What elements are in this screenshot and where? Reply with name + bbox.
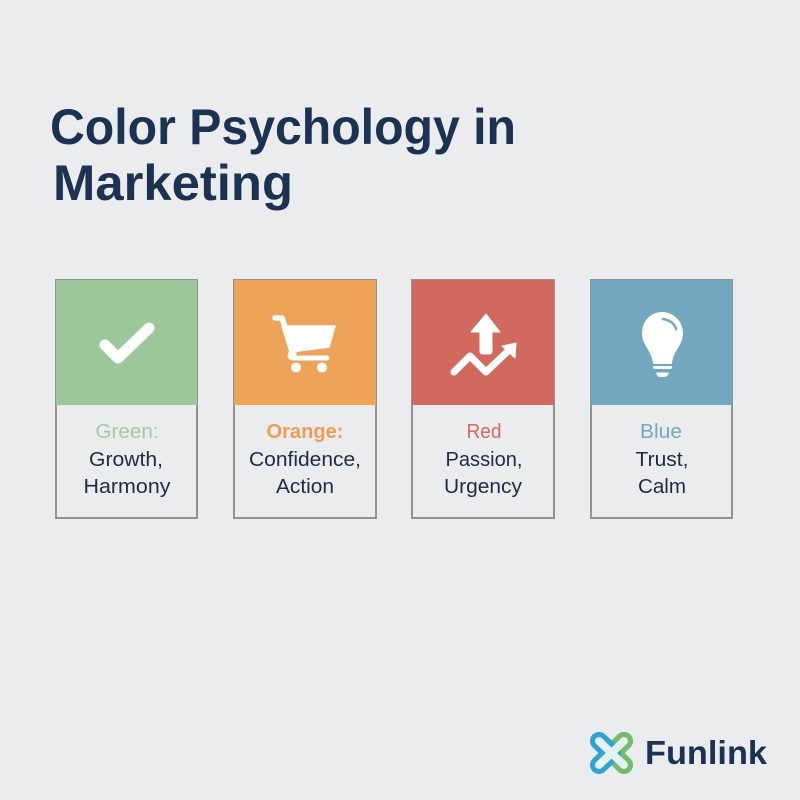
title: Marketing [53, 155, 293, 211]
logo: Funlink [599, 734, 768, 771]
icon: growth arrows [454, 314, 516, 372]
text: confidence action: Action [276, 475, 334, 498]
icon: logo cross [599, 741, 624, 765]
text: trust calm: Calm [638, 475, 686, 498]
label: red: Red [466, 420, 502, 443]
text: confidence action: Confidence, [249, 448, 361, 471]
label: blue: Blue [640, 420, 682, 443]
text: passion urgency [444, 448, 523, 498]
text: passion urgency: Passion, [446, 448, 522, 471]
icon: check mark [105, 328, 149, 358]
title: Color Psychology in [50, 99, 516, 155]
text: passion urgency: Urgency [444, 475, 523, 498]
wordmark: Funlink [645, 734, 768, 771]
text: growth harmony: Growth, [89, 448, 163, 471]
panel: green card [56, 280, 197, 518]
text: growth harmony: Harmony [84, 475, 171, 498]
panel: blue card [591, 280, 732, 518]
icon: shopping cart [275, 318, 335, 372]
icon: light bulb [642, 312, 683, 377]
label: green: Green: [96, 420, 158, 443]
title [50, 99, 516, 211]
label: orange: Orange: [266, 420, 344, 443]
text: trust calm [636, 448, 688, 498]
text: confidence action [249, 448, 361, 498]
text: trust calm: Trust, [636, 448, 688, 471]
panel: red card [412, 280, 554, 518]
text: growth harmony [84, 448, 171, 498]
panel: orange card [234, 280, 376, 518]
